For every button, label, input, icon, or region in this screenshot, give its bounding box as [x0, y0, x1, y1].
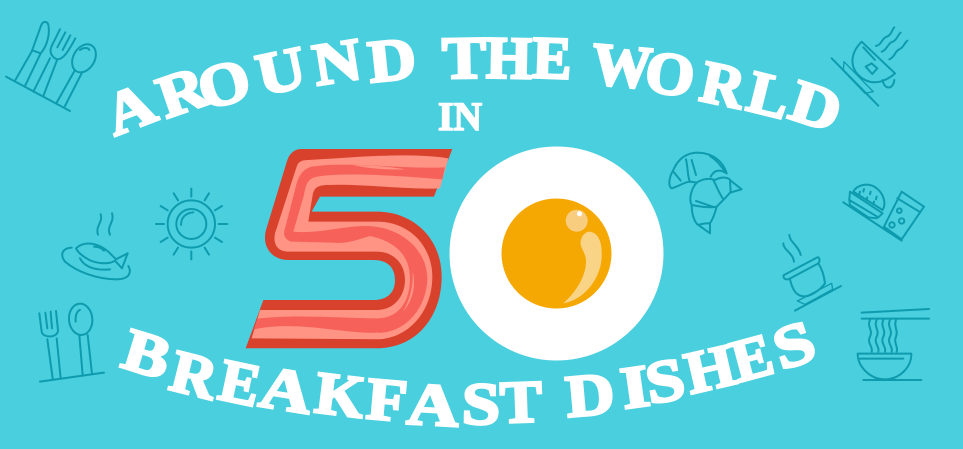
- icon: knife, fork and spoon: [6, 22, 101, 111]
- title: around the world: R: [149, 52, 217, 131]
- title: breakfast dishes: B: [115, 315, 179, 392]
- title: breakfast dishes: A: [405, 371, 461, 440]
- icon: tea cup on saucer: [832, 27, 907, 106]
- title: around the world: U: [250, 33, 312, 109]
- title: breakfast dishes: H: [679, 332, 741, 407]
- title: around the world: D: [782, 66, 850, 145]
- title: around the world: O: [641, 38, 699, 111]
- title: in: IN: [438, 94, 482, 139]
- icon: sun-shaped plate: [156, 189, 227, 259]
- title: around the world: E: [531, 24, 573, 92]
- title: around the world: [95, 24, 850, 149]
- title: breakfast dishes: R: [164, 338, 225, 413]
- title: breakfast dishes: [115, 308, 823, 440]
- title: breakfast dishes: A: [255, 354, 317, 427]
- fried egg forming the zero: [450, 146, 664, 360]
- title: around the world: O: [191, 45, 257, 123]
- title: breakfast dishes: D: [563, 359, 617, 430]
- title: breakfast dishes: E: [214, 347, 266, 419]
- icon: croissants: [669, 153, 742, 233]
- title: breakfast dishes: T: [499, 369, 543, 436]
- title: breakfast dishes: S: [461, 370, 501, 437]
- icon: fork and spoon: [39, 303, 104, 382]
- title: around the world: A: [95, 69, 165, 149]
- title: around the world: N: [308, 25, 366, 99]
- icon: burger and drink: [843, 185, 924, 241]
- title: around the world: W: [589, 31, 655, 101]
- title: around the world: D: [365, 24, 419, 96]
- numeral 5 made of bacon: [246, 149, 452, 348]
- icon: steaming fish on a plate: [62, 213, 130, 279]
- title: breakfast dishes: K: [312, 360, 368, 431]
- icon: noodle bowl with chopsticks: [858, 309, 929, 380]
- icon: steaming bowl on saucer: [783, 235, 841, 311]
- title: around the world: L: [741, 59, 797, 133]
- title: breakfast dishes: F: [364, 365, 410, 435]
- title: breakfast dishes: E: [724, 321, 780, 395]
- title: breakfast dishes: S: [640, 344, 690, 417]
- title: around the world: T: [441, 24, 487, 92]
- title: around the world: R: [695, 48, 752, 122]
- title: breakfast dishes: S: [765, 308, 823, 383]
- title: breakfast dishes: I: [617, 353, 654, 422]
- title: around the world: H: [486, 24, 532, 92]
